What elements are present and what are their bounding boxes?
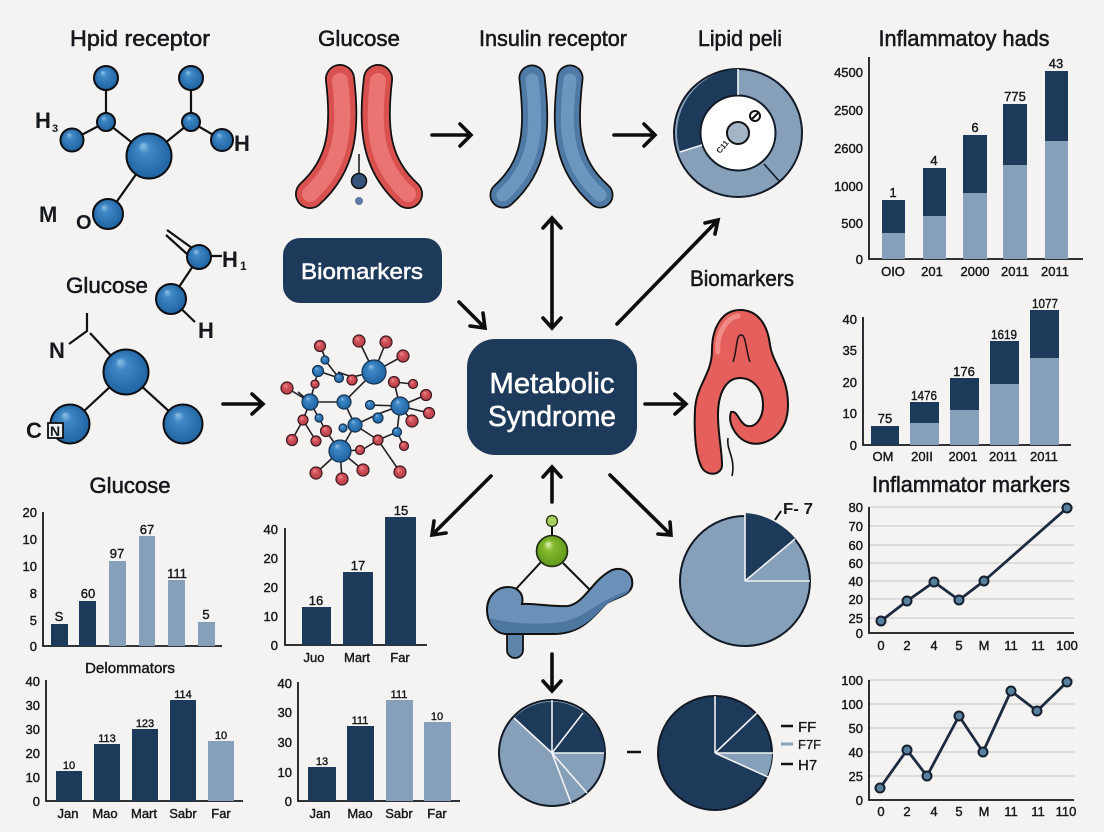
stacked bar chart: inflammatory heads: 500 — [841, 216, 863, 231]
bar chart: Juo to Far: 10 — [264, 609, 278, 624]
bar chart: Jan to Far — [278, 676, 460, 821]
stacked bar chart: inflammatory heads: 2600 — [834, 141, 863, 156]
bar chart: Jan to Far: 10 — [431, 711, 443, 723]
pie chart: segmented blue and dark — [499, 700, 605, 806]
stacked bar chart: second series: 2011 — [1030, 449, 1058, 464]
line chart: inflammator markers: M — [979, 638, 989, 653]
stacked bar chart: second series: 2001 — [949, 449, 977, 464]
stacked bar chart: second series: 35 — [843, 343, 857, 358]
icon: blue insulin receptor — [503, 78, 600, 195]
arrow: receptor to insulin receptor — [432, 124, 471, 146]
bar chart: Jan to Far: 13 — [316, 756, 328, 768]
label: Glucose beside molecule: Glucose — [66, 273, 148, 298]
bar chart: Jan to Far: 40 — [278, 676, 292, 691]
line chart: inflammator markers — [849, 472, 1078, 653]
pie chart: mostly dark — [658, 696, 774, 810]
line chart: second series: 11 — [1004, 804, 1018, 819]
stacked bar chart: inflammatory heads: OIO — [881, 264, 905, 279]
bar chart: glucose: 97 — [110, 546, 124, 561]
chart title: Inflammator markers — [872, 472, 1070, 497]
icon: ligand bound protein — [487, 516, 632, 658]
arrow: insulin receptor and syndrome two-way — [543, 218, 561, 328]
line chart: inflammator markers: 100 — [1056, 638, 1078, 653]
chart title: Inflammatoy hads — [878, 26, 1050, 51]
donut chart: lipid panel: C11 — [715, 138, 731, 155]
icon: molecule one: H — [234, 131, 250, 156]
stacked bar chart: inflammatory heads: 2011 — [1041, 264, 1069, 279]
stacked bar chart: inflammatory heads: 1 — [889, 185, 897, 200]
legend: pie chart keys: FF — [798, 719, 816, 736]
donut chart: lipid panel — [674, 69, 802, 197]
icon: molecule one: H — [35, 108, 51, 133]
icon: molecule three: N — [50, 423, 60, 439]
line chart: second series: 0 — [877, 804, 885, 819]
line chart: inflammator markers: 25 — [849, 611, 863, 626]
pie chart: F-7: F- 7 — [783, 501, 813, 518]
bar chart: Juo to Far — [264, 503, 427, 665]
bar chart: Juo to Far: Juo — [304, 650, 324, 665]
bar chart: Juo to Far: 15 — [394, 503, 408, 518]
line chart: inflammator markers: 80 — [849, 500, 863, 515]
line chart: second series: 0 — [856, 793, 863, 808]
heading: Biomarkers: Biomarkers — [690, 266, 794, 291]
bar chart: Jan to Far: 10 — [278, 765, 292, 780]
icon: molecule two: H — [198, 318, 214, 343]
line chart: inflammator markers: 0 — [877, 638, 885, 653]
stacked bar chart: inflammatory heads: 0 — [856, 252, 863, 267]
arrow: insulin receptor to lipid panel — [614, 124, 655, 146]
stacked bar chart: second series: 0 — [850, 438, 857, 453]
bar chart: Jan to Far: Far — [427, 806, 447, 821]
stacked bar chart: second series — [843, 296, 1071, 464]
line chart: inflammator markers: 11 — [1004, 638, 1018, 653]
bar chart: Jan to Far: 30 — [278, 735, 292, 750]
bar chart: glucose — [23, 473, 222, 654]
bar chart: Jan to Far: 111 — [391, 689, 407, 701]
bar chart: Juo to Far: Mart — [344, 650, 370, 665]
icon: molecule one: M — [39, 202, 57, 227]
bar chart: Jan to Far: 111 — [352, 715, 368, 727]
bar chart: glucose: 10 — [23, 559, 37, 574]
bar chart: delommators: 30 — [26, 722, 40, 737]
bar chart: Jan to Far: Jan — [310, 806, 330, 821]
chart title: Delommators — [85, 660, 175, 677]
bar chart: delommators: Sabr — [169, 806, 197, 821]
icon: molecule two — [156, 230, 247, 343]
heading: Glucose: Glucose — [318, 26, 400, 51]
icon: molecule three — [26, 313, 202, 444]
bar chart: Jan to Far: 30 — [278, 705, 292, 720]
line chart: inflammator markers: 60 — [849, 556, 863, 571]
connector dash — [627, 751, 641, 753]
line chart: inflammator markers: 4 — [930, 638, 938, 653]
box: Biomarkers: Biomarkers — [301, 259, 423, 284]
heading: Lipid peli: Lipid peli — [698, 26, 782, 51]
bar chart: glucose: 0 — [30, 639, 37, 654]
bar chart: delommators: 113 — [98, 733, 116, 745]
line chart: second series: 25 — [849, 769, 863, 784]
stacked bar chart: second series: OM — [873, 449, 893, 464]
stacked bar chart: inflammatory heads: 4 — [930, 153, 938, 168]
line chart: inflammator markers: 5 — [955, 638, 963, 653]
line chart: second series: 50 — [849, 721, 863, 736]
box: Metabolic Syndrome: Metabolic — [490, 368, 614, 400]
bar chart: delommators: Jan — [58, 806, 78, 821]
line chart: second series: 110 — [1056, 804, 1076, 819]
bar chart: delommators: 10 — [26, 770, 40, 785]
box: Metabolic Syndrome: Syndrome — [488, 401, 616, 433]
stacked bar chart: second series: 2011 — [989, 449, 1017, 464]
stacked bar chart: second series: 176 — [953, 364, 975, 379]
bar chart: delommators: 10 — [63, 760, 75, 772]
chart title: Glucose — [90, 473, 170, 498]
arrow: syndrome to bar chart — [432, 476, 491, 535]
bar chart: glucose: 20 — [23, 505, 37, 520]
bar chart: delommators: 40 — [26, 674, 40, 689]
bar chart: Jan to Far: Sabr — [385, 806, 413, 821]
bar chart: glucose: 111 — [167, 566, 187, 581]
box: Metabolic Syndrome — [467, 339, 637, 455]
bar chart: delommators: 114 — [174, 689, 192, 701]
line chart: second series: 11 — [1031, 804, 1045, 819]
line chart: second series — [841, 673, 1076, 819]
line chart: inflammator markers: 70 — [849, 519, 863, 534]
arrow: syndrome to lipid panel — [617, 220, 718, 324]
line chart: inflammator markers: 60 — [849, 538, 863, 553]
line chart: second series: 4 — [930, 804, 938, 819]
bar chart: Juo to Far: 16 — [309, 593, 323, 608]
icon: molecule one: O — [76, 212, 92, 234]
bar chart: delommators: Far — [211, 806, 231, 821]
bar chart: glucose: 8 — [30, 586, 37, 601]
pie chart: F-7 — [680, 501, 813, 646]
bar chart: delommators: Mao — [92, 806, 118, 821]
bar chart: glucose: 5 — [30, 613, 37, 628]
arrow: small molecule to pie — [543, 654, 561, 691]
bar chart: delommators: 0 — [33, 794, 40, 809]
arrow: molecule to network — [223, 394, 263, 414]
stacked bar chart: second series: 20II — [911, 449, 933, 464]
line chart: second series: 100 — [841, 673, 863, 688]
icon: molecule two: H — [222, 247, 238, 272]
heading: Insulin receptor: Insulin receptor — [479, 26, 627, 51]
stacked bar chart: inflammatory heads: 2500 — [834, 103, 863, 118]
bar chart: Juo to Far: Far — [390, 650, 410, 665]
stacked bar chart: inflammatory heads: 2011 — [1001, 264, 1029, 279]
line chart: second series: 40 — [849, 745, 863, 760]
stacked bar chart: inflammatory heads: 4500 — [834, 65, 863, 80]
box: Biomarkers — [283, 238, 442, 303]
stacked bar chart: second series: 1476 — [911, 388, 937, 403]
line chart: inflammator markers: 11 — [1031, 638, 1045, 653]
icon: molecule three: C — [26, 418, 42, 443]
bar chart: Juo to Far: 20 — [264, 580, 278, 595]
stacked bar chart: second series: 75 — [878, 411, 892, 426]
line chart: second series: 100 — [841, 697, 863, 712]
stacked bar chart: second series: 1619 — [991, 327, 1017, 342]
line chart: inflammator markers: 0 — [856, 626, 863, 641]
arrow: biomarkers to syndrome — [459, 302, 485, 328]
arrow: small molecule to syndrome — [543, 467, 561, 502]
bar chart: Juo to Far: 40 — [264, 522, 278, 537]
line chart: second series: 2 — [903, 804, 911, 819]
stacked bar chart: inflammatory heads: 2000 — [961, 264, 989, 279]
heading: Hpid receptor: Hpid receptor — [70, 26, 210, 51]
icon: molecule one — [35, 66, 250, 234]
legend: pie chart keys: H7 — [798, 757, 817, 774]
line chart: inflammator markers: 20 — [849, 592, 863, 607]
bar chart: Jan to Far: Mao — [347, 806, 373, 821]
stacked bar chart: second series: 10 — [843, 406, 857, 421]
legend: pie chart keys — [781, 719, 821, 774]
bar chart: Juo to Far: 17 — [351, 558, 365, 573]
icon: molecule one: 3 — [52, 123, 58, 135]
bar chart: delommators: 10 — [215, 730, 227, 742]
bar chart: glucose: 10 — [23, 532, 37, 547]
icon: red organ — [695, 310, 788, 476]
bar chart: glucose: 67 — [140, 522, 154, 537]
bar chart: delommators: 30 — [26, 698, 40, 713]
bar chart: delommators — [26, 660, 243, 821]
bar chart: delommators: 20 — [26, 746, 40, 761]
bar chart: delommators: 123 — [136, 718, 154, 730]
line chart: second series: M — [979, 804, 989, 819]
bar chart: Jan to Far: 0 — [285, 794, 292, 809]
stacked bar chart: inflammatory heads: 775 — [1004, 89, 1026, 104]
icon: molecular network — [281, 335, 434, 485]
arrow: syndrome to organ — [645, 394, 686, 414]
bar chart: Juo to Far: 0 — [271, 638, 278, 653]
arrow: syndrome to pie chart — [610, 475, 671, 535]
stacked bar chart: second series: 40 — [843, 312, 857, 327]
bar chart: delommators: Mart — [131, 806, 157, 821]
bar chart: Juo to Far: 20 — [264, 551, 278, 566]
stacked bar chart: inflammatory heads: 6 — [971, 120, 979, 135]
icon: molecule two: 1 — [240, 259, 247, 273]
stacked bar chart: inflammatory heads: 1000 — [834, 179, 863, 194]
bar chart: glucose: 5 — [202, 607, 210, 622]
stacked bar chart: inflammatory heads — [834, 26, 1083, 279]
bar chart: glucose: 60 — [81, 586, 95, 601]
stacked bar chart: inflammatory heads: 43 — [1049, 56, 1063, 71]
icon: red receptor — [310, 79, 408, 205]
line chart: inflammator markers: 40 — [849, 574, 863, 589]
stacked bar chart: second series: 20 — [843, 375, 857, 390]
stacked bar chart: inflammatory heads: 201 — [921, 264, 943, 279]
line chart: second series: 5 — [955, 804, 963, 819]
line chart: inflammator markers: 2 — [903, 638, 911, 653]
stacked bar chart: second series: 1077 — [1032, 296, 1058, 311]
bar chart: glucose: S — [55, 609, 64, 624]
legend: pie chart keys: F7F — [798, 737, 821, 752]
icon: molecule three: N — [49, 338, 65, 363]
